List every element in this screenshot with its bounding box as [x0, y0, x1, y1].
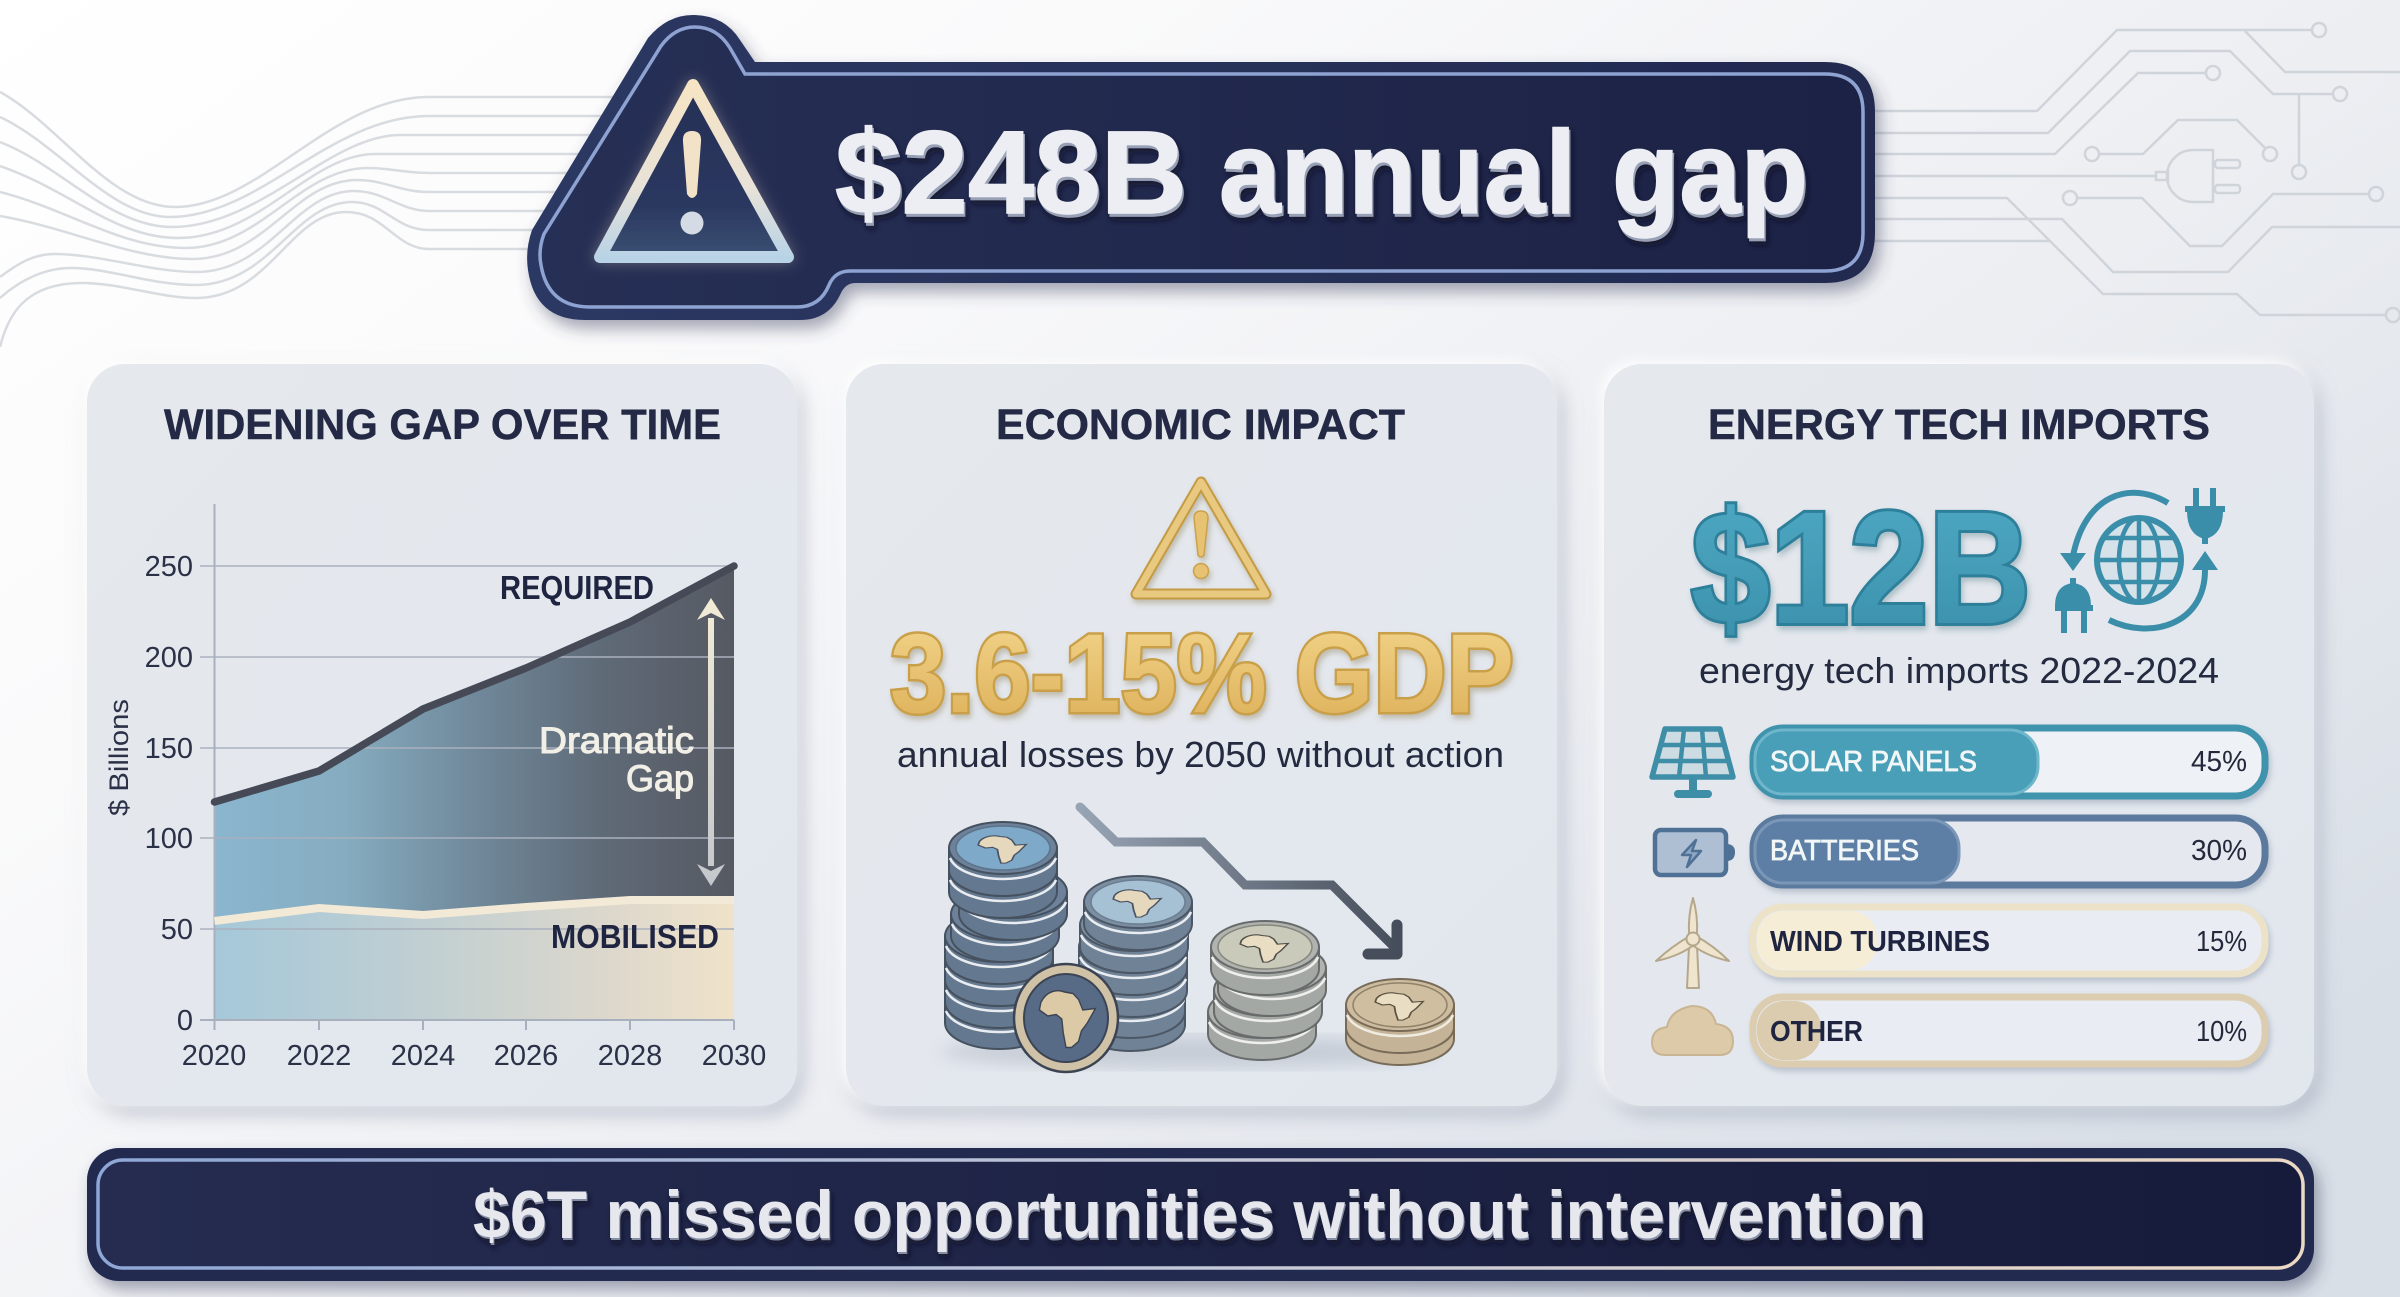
- x axis labels: 2024: [391, 1040, 455, 1072]
- bar track: [1753, 818, 2265, 885]
- bar value: 10%: [2196, 1016, 2247, 1048]
- mobilised line: [214, 900, 734, 921]
- bar track: [1753, 728, 2265, 796]
- bar value: 30%: [2191, 835, 2247, 867]
- x axis labels: [182, 1040, 766, 1072]
- x axis labels: 2020: [182, 1040, 246, 1072]
- panel: economic impact: [846, 364, 1557, 1106]
- banner inner outline: [98, 1160, 2303, 1268]
- title: [835, 107, 1808, 239]
- panel card: [846, 364, 1557, 1106]
- coin stack: medium: [1077, 876, 1192, 1051]
- title: annual: [1219, 107, 1576, 239]
- figure caption: energy tech imports 2022-2024: [1699, 650, 2219, 691]
- y axis labels: 50: [161, 914, 193, 946]
- panel: widening gap over time: [87, 364, 797, 1106]
- bar value: 45%: [2191, 746, 2247, 778]
- y axis labels: 200: [145, 642, 193, 674]
- coin stack: small tan: [1346, 979, 1454, 1065]
- bar fill: [1755, 820, 1959, 883]
- panel heading: ECONOMIC IMPACT: [996, 401, 1405, 449]
- standing coin: [1014, 964, 1118, 1072]
- banner bar: [87, 1148, 2314, 1281]
- x axis labels: 2026: [494, 1040, 558, 1072]
- coin stack: tall: [945, 822, 1067, 1049]
- label: required: REQUIRED: [500, 569, 654, 606]
- label: dramatic gap: Gap: [626, 758, 694, 799]
- panel card: [87, 364, 797, 1106]
- icon: gold warning triangle: [1136, 482, 1266, 594]
- bar label: BATTERIES: [1770, 835, 1919, 867]
- icon: globe with plugs: [2055, 488, 2225, 633]
- bar label: OTHER: [1770, 1016, 1863, 1048]
- bar label: WIND TURBINES: [1770, 926, 1990, 958]
- panel card: [1604, 364, 2314, 1106]
- y axis labels: 0: [177, 1005, 193, 1037]
- label: dramatic gap: Dramatic: [539, 720, 694, 761]
- illustration: coin stacks: [940, 807, 1454, 1072]
- arrow: gap span: [697, 598, 725, 886]
- area chart: [104, 504, 766, 1072]
- big figure: $12B: [1691, 478, 2031, 657]
- icon: battery: [1655, 830, 1735, 875]
- mobilised area: [214, 900, 734, 1020]
- icon: header warning triangle: [600, 85, 788, 257]
- panel heading: ENERGY TECH IMPORTS: [1708, 401, 2210, 449]
- x axis labels: 2028: [598, 1040, 662, 1072]
- row: other: [1652, 997, 2265, 1064]
- y axis labels: 150: [145, 733, 193, 765]
- bar track: [1753, 907, 2265, 974]
- bar fill: [1755, 730, 2038, 794]
- y axis labels: [145, 551, 193, 1037]
- label: dramatic gap: [539, 720, 694, 799]
- icon: cloud: [1652, 1006, 1733, 1055]
- big figure: 3.6-15% GDP: [890, 611, 1514, 736]
- gap area: [214, 566, 734, 921]
- bar fill: [1757, 911, 1877, 970]
- panel: energy tech imports: [1604, 364, 2314, 1106]
- panel heading: WIDENING GAP OVER TIME: [164, 401, 721, 449]
- banner inner outline: [540, 27, 1863, 307]
- y axis title: $ Billions: [104, 699, 134, 816]
- label: mobilised: MOBILISED: [551, 918, 719, 955]
- title: gap: [1612, 107, 1808, 239]
- bar label: SOLAR PANELS: [1770, 746, 1977, 778]
- y axis labels: 250: [145, 551, 193, 583]
- bar value: 15%: [2196, 926, 2247, 958]
- banner shape: [527, 15, 1875, 320]
- bar track: [1753, 997, 2265, 1064]
- required line: [214, 566, 734, 802]
- row: wind turbines: [1656, 898, 2265, 988]
- row: batteries: [1655, 818, 2265, 885]
- bottom banner: [87, 1148, 2314, 1281]
- header banner: [527, 15, 1875, 320]
- icon: wind turbine: [1656, 898, 1729, 988]
- row: solar panels: [1652, 728, 2265, 796]
- banner text: $6T missed opportunities without intervention: [473, 1177, 1926, 1253]
- coin stack: short grey: [1208, 921, 1326, 1060]
- icon: solar panel: [1652, 729, 1733, 794]
- figure caption: annual losses by 2050 without action: [897, 734, 1504, 775]
- bar fill: [1757, 1001, 1821, 1060]
- arrow: falling trend: [1080, 807, 1397, 954]
- x axis labels: 2030: [702, 1040, 766, 1072]
- x axis labels: 2022: [287, 1040, 351, 1072]
- title: $248B: [835, 107, 1187, 239]
- y axis labels: 100: [145, 823, 193, 855]
